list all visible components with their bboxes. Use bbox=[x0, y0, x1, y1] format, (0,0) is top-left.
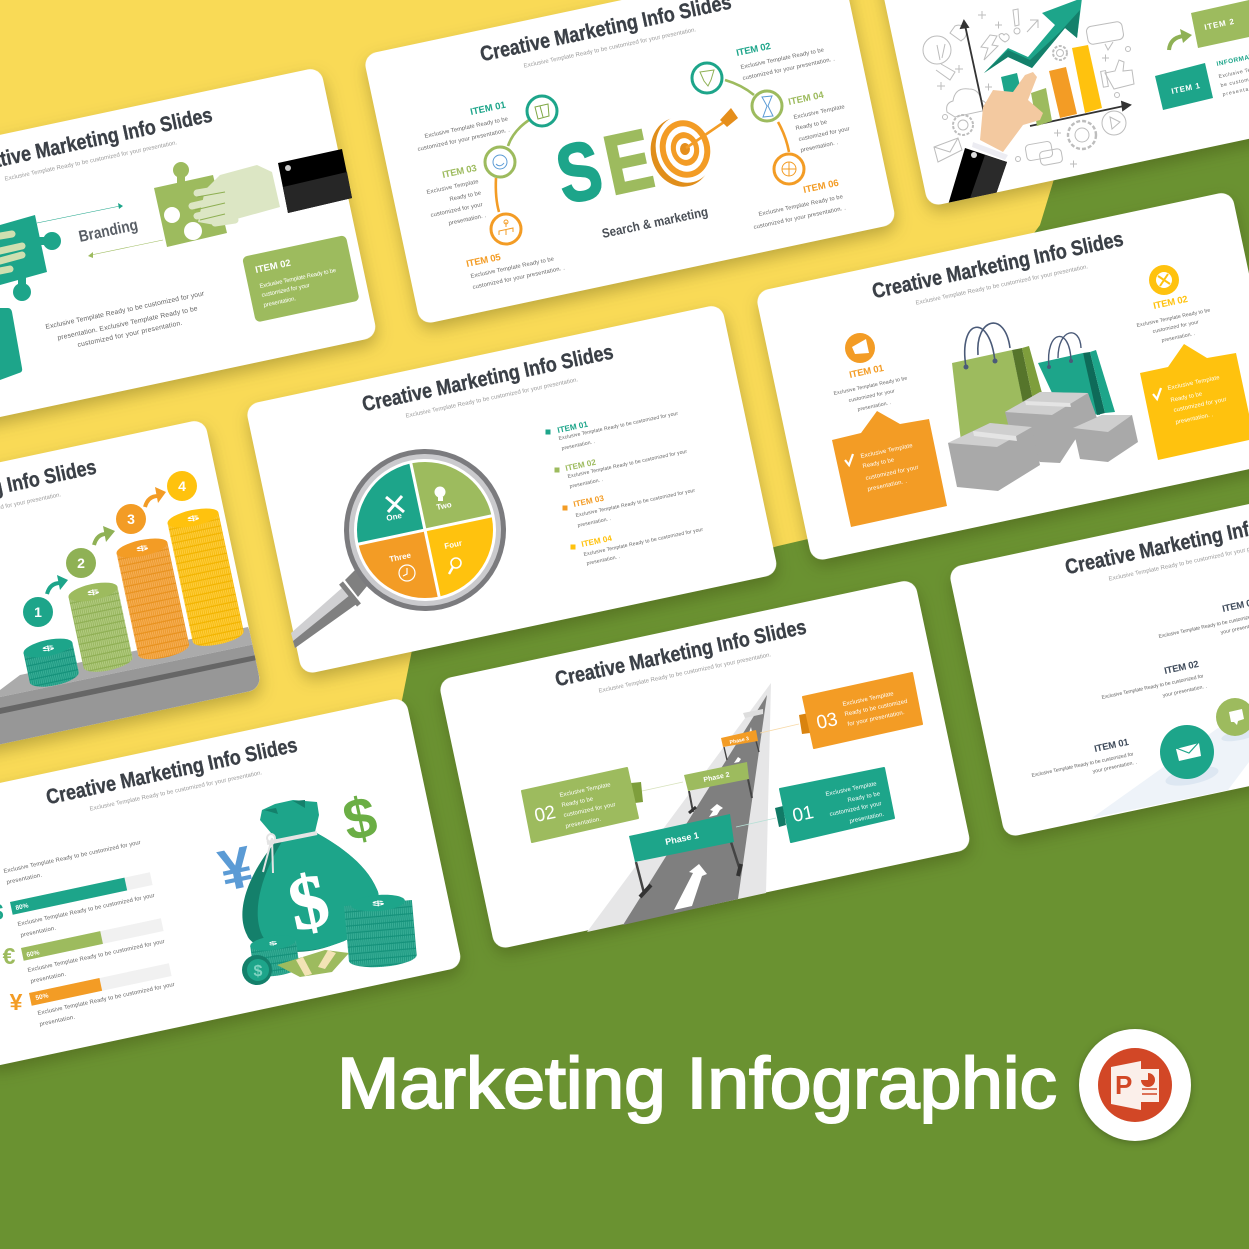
arrow: item 1 to item 2 bbox=[1169, 29, 1192, 50]
coin stack green: $ bbox=[86, 587, 100, 598]
callout: item 02: customized for your bbox=[261, 283, 310, 299]
information text bbox=[1216, 51, 1249, 98]
list item 03: Exclusive Template Ready to be customized for your bbox=[575, 488, 696, 519]
item 04 text bbox=[787, 90, 850, 154]
currency symbols: € bbox=[3, 943, 16, 969]
callout 01: customized for your bbox=[829, 801, 882, 818]
quadrant labels: One bbox=[386, 511, 403, 523]
list item 04: Exclusive Template Ready to be customized for your bbox=[583, 527, 704, 558]
heading: Creative Marketing Info Slides bbox=[553, 616, 808, 691]
doodle icons bbox=[923, 9, 1134, 168]
callout: item 02: presentation. bbox=[263, 296, 297, 309]
item 03 text: customized for your bbox=[430, 202, 483, 219]
callout 01: 01 bbox=[791, 802, 816, 827]
panel: SEO slide bbox=[363, 0, 897, 325]
panel: coins slide bbox=[0, 419, 262, 790]
slide card bbox=[755, 191, 1249, 562]
orange callout: customized for your bbox=[865, 465, 919, 482]
item 01 text: your presentation. . bbox=[1092, 760, 1137, 775]
item 1 box bbox=[1155, 63, 1213, 110]
list item 04 bbox=[570, 527, 704, 567]
icon: megaphone bbox=[845, 333, 875, 363]
paragraph 3: presentation. bbox=[30, 972, 67, 985]
paragraph 4: presentation. bbox=[39, 1015, 76, 1028]
paragraph 2: presentation. bbox=[20, 926, 57, 939]
pale road band bbox=[1092, 728, 1249, 818]
item 01 text: Exclusive Template Ready to be bbox=[833, 375, 908, 397]
currency symbols bbox=[0, 899, 23, 1015]
green shopping bag bbox=[952, 323, 1042, 450]
item 02 text bbox=[735, 41, 836, 82]
list item 03: presentation. . bbox=[577, 516, 612, 529]
paragraph bbox=[45, 290, 206, 349]
callout 01: Exclusive Template bbox=[825, 781, 878, 798]
icon: search bbox=[449, 558, 461, 574]
orange callout: Ready to be bbox=[862, 457, 895, 470]
connectors bbox=[642, 724, 799, 827]
branding label: Branding bbox=[77, 217, 140, 246]
panel: branding puzzle slide bbox=[0, 67, 378, 438]
list item 01: presentation. . bbox=[561, 439, 596, 452]
quadrant labels: Four bbox=[444, 538, 463, 551]
item 01 text bbox=[833, 363, 908, 413]
target with arrow bbox=[643, 108, 738, 194]
SEO letters: S bbox=[549, 124, 610, 222]
coin stack teal: $ bbox=[41, 643, 55, 654]
callout 02: Ready to be bbox=[561, 796, 594, 809]
coin stack small: $ bbox=[269, 940, 279, 947]
subtitle: Exclusive Template Ready to be customized for your presentation. bbox=[523, 27, 697, 70]
item 04 text: ITEM 04 bbox=[787, 90, 826, 108]
item 03 text: presentation. . bbox=[448, 213, 487, 227]
icon: globe bbox=[1149, 265, 1179, 295]
list item 01: Exclusive Template Ready to be customized for your bbox=[558, 411, 679, 442]
icon: mail bbox=[1160, 725, 1220, 789]
phase 1 sign bbox=[629, 814, 741, 897]
yellow callout bbox=[1140, 344, 1249, 460]
sleeve bbox=[948, 142, 1008, 203]
progress bar 50%: 50% bbox=[35, 992, 49, 1002]
coin stack orange bbox=[115, 535, 191, 663]
subtitle: Exclusive Template Ready to be customized for your presentation. bbox=[405, 377, 579, 420]
item 02 text: customized for your presentation. . bbox=[742, 56, 836, 82]
bar chart bbox=[1001, 45, 1102, 126]
slide card bbox=[245, 304, 779, 675]
subtitle: Exclusive Template Ready to be customized for your presentation. bbox=[4, 140, 178, 183]
item 06 text: Exclusive Template Ready to be bbox=[758, 194, 844, 218]
coin stack yellow: $ bbox=[186, 513, 200, 524]
slide card bbox=[0, 697, 463, 1068]
paragraph 3: Exclusive Template Ready to be customized for your bbox=[27, 939, 165, 974]
item 01 text bbox=[417, 100, 511, 153]
axes bbox=[961, 21, 1130, 126]
paragraph: Exclusive Template Ready to be customized for your bbox=[45, 290, 206, 331]
item 03 text: Exclusive Template bbox=[426, 179, 479, 196]
dollar symbol: $ bbox=[337, 784, 382, 854]
panel: shopping slide bbox=[755, 191, 1249, 562]
icon: bulb bbox=[434, 486, 446, 501]
step arrows bbox=[47, 487, 166, 594]
callout 03: Ready to be customized bbox=[844, 699, 908, 718]
item 2 box: ITEM 2 bbox=[1204, 17, 1235, 32]
coin stack yellow bbox=[166, 505, 245, 650]
phase 3 sign bbox=[721, 730, 759, 760]
item 02 text: Exclusive Template Ready to be bbox=[1136, 307, 1211, 329]
list item 04: presentation. . bbox=[586, 554, 621, 567]
item 02 text: your presentation. . bbox=[1162, 684, 1207, 699]
item 2 box bbox=[1191, 0, 1249, 48]
list item 02: ITEM 02 bbox=[565, 458, 597, 473]
item 06 text: ITEM 06 bbox=[802, 178, 840, 196]
callout 02: 02 bbox=[533, 802, 558, 827]
coin stack small bbox=[249, 933, 300, 979]
progress bar 80% bbox=[10, 872, 153, 915]
yellow callout: presentation. . bbox=[1175, 412, 1214, 426]
progress bar 60% bbox=[21, 918, 164, 961]
callout 02: presentation. bbox=[565, 817, 602, 830]
orange callout: Exclusive Template bbox=[860, 443, 914, 460]
item 04 text: Ready to be bbox=[795, 119, 828, 132]
platform bbox=[0, 627, 262, 750]
panel: money bag slide bbox=[0, 697, 463, 1068]
icon: powerpoint: P bbox=[1115, 1070, 1132, 1100]
money bag bbox=[242, 800, 379, 952]
item 02 text: ITEM 02 bbox=[1152, 294, 1189, 312]
slide card bbox=[438, 579, 972, 950]
callout 02 bbox=[522, 768, 643, 842]
item 01 text: customized for your bbox=[848, 388, 896, 404]
rising arrow bbox=[984, 0, 1082, 73]
parcel boxes bbox=[948, 392, 1138, 491]
magnifier lens bbox=[329, 434, 521, 626]
teal shopping bag bbox=[1038, 333, 1115, 415]
coin stack large: $ bbox=[372, 899, 385, 908]
phase 2 sign bbox=[684, 762, 752, 813]
heading: Creative Marketing Info Slides bbox=[44, 734, 299, 809]
list item 01 bbox=[546, 411, 679, 452]
panel: contact slide bbox=[948, 467, 1249, 838]
item 03 text: Ready to be bbox=[449, 190, 482, 203]
black sleeve bbox=[278, 149, 352, 213]
item 04 text: presentation. . bbox=[800, 140, 839, 154]
quadrant labels bbox=[386, 500, 463, 564]
item 04 text: customized for your bbox=[798, 126, 850, 143]
item 02 text: Exclusive Template Ready to be customized for bbox=[1101, 673, 1204, 701]
arrow: green bbox=[88, 240, 163, 258]
icon: tools bbox=[386, 496, 404, 512]
icon: powerpoint bbox=[1079, 1029, 1191, 1141]
item 01 text: customized for your presentation. . bbox=[417, 127, 511, 153]
item 05 text: customized for your presentation. . bbox=[472, 265, 566, 291]
item 04 text: Exclusive Template bbox=[793, 104, 845, 121]
callout 01: Ready to be bbox=[847, 791, 881, 804]
paragraph: presentation. Exclusive Template Ready to be bbox=[57, 305, 199, 342]
slide card bbox=[363, 0, 897, 325]
callout 03: for your presentation. bbox=[847, 710, 905, 728]
magnifier handle bbox=[291, 565, 372, 648]
paragraph 1: Exclusive Template Ready to be customized for your bbox=[3, 840, 141, 875]
step circles bbox=[23, 471, 197, 627]
list item 03: ITEM 03 bbox=[573, 494, 605, 509]
callout 03: 03 bbox=[815, 709, 840, 734]
step circles: 3 bbox=[127, 511, 135, 527]
item 1 box: ITEM 1 bbox=[1171, 81, 1201, 96]
phase 2 sign: Phase 2 bbox=[703, 772, 730, 784]
SEO letters bbox=[549, 111, 661, 222]
currency symbols: ¥ bbox=[10, 989, 23, 1015]
item 02 text: customized for your bbox=[1152, 319, 1200, 335]
yellow callout: Ready to be bbox=[1170, 391, 1203, 404]
slide card bbox=[948, 467, 1249, 838]
heading: Creative Marketing Info Slides bbox=[360, 341, 615, 416]
item 01 text: ITEM 01 bbox=[469, 100, 508, 118]
item 01 text bbox=[1031, 737, 1137, 779]
callout 02: Exclusive Template bbox=[559, 782, 612, 799]
item 01 text: Exclusive Template Ready to be customized for bbox=[1031, 751, 1134, 779]
item 03 text bbox=[426, 163, 487, 227]
heading: Creative Marketing Info Slides bbox=[870, 228, 1125, 303]
callout 01 bbox=[775, 768, 894, 842]
item 02 text: presentation. . bbox=[1161, 331, 1196, 344]
panel: growth chart slide bbox=[871, 0, 1249, 215]
teal puzzle piece bbox=[0, 215, 61, 301]
callout: item 02: ITEM 02 bbox=[254, 258, 292, 276]
coin stack large bbox=[343, 892, 417, 970]
item 05 text: Exclusive Template Ready to be bbox=[470, 256, 555, 280]
coin face: $ bbox=[254, 963, 263, 980]
list item 04: ITEM 04 bbox=[581, 534, 613, 549]
callout 03 bbox=[799, 673, 922, 748]
paragraph: customized for your presentation. bbox=[77, 320, 183, 349]
pointing hand bbox=[980, 72, 1043, 152]
paragraph 1: presentation. bbox=[6, 873, 43, 886]
search and marketing caption: Search & marketing bbox=[601, 204, 709, 241]
orange callout bbox=[832, 411, 947, 527]
subtitle: Exclusive Template Ready to be customized for your presentation. bbox=[598, 652, 772, 695]
progress bar 50% bbox=[29, 963, 172, 1006]
item 05 text: ITEM 05 bbox=[465, 252, 503, 270]
phase 1 sign: Phase 1 bbox=[664, 830, 700, 847]
step circles: 2 bbox=[77, 555, 85, 571]
paragraph 2: Exclusive Template Ready to be customized for your bbox=[17, 893, 155, 928]
step circles: 1 bbox=[34, 604, 42, 620]
callout: item 02: Exclusive Template Ready to be bbox=[259, 268, 337, 290]
teal box bbox=[0, 308, 22, 380]
coin stack green bbox=[67, 579, 134, 675]
icon: clock bbox=[399, 565, 415, 581]
yellow callout: Exclusive Template bbox=[1167, 375, 1221, 392]
progress bar 80%: 80% bbox=[15, 902, 29, 912]
icon: chat bbox=[1216, 698, 1249, 744]
item 03 text: ITEM 03 bbox=[441, 163, 478, 181]
item 02 text: ITEM 02 bbox=[735, 41, 772, 59]
list item 02: Exclusive Template Ready to be customized for your bbox=[567, 449, 688, 480]
callout 01: presentation. bbox=[849, 812, 885, 825]
subtitle: Exclusive Template Ready to be customized for your presentation. bbox=[915, 264, 1089, 307]
item 02 text bbox=[1101, 659, 1207, 701]
quadrant chart bbox=[344, 449, 506, 611]
road bbox=[587, 683, 771, 932]
callout 03: Exclusive Template bbox=[842, 691, 895, 708]
progress bar 60%: 60% bbox=[26, 949, 40, 959]
SEO letters: E bbox=[596, 111, 661, 213]
yellow callout: customized for your bbox=[1173, 397, 1227, 414]
connectors bbox=[496, 80, 789, 212]
phase 3 sign: Phase 3 bbox=[729, 736, 750, 746]
green puzzle piece bbox=[154, 162, 227, 247]
panel: road slide bbox=[438, 579, 972, 950]
arrow: teal bbox=[37, 203, 123, 223]
panel: magnifier slide bbox=[245, 304, 779, 675]
item 02 text: Exclusive Template Ready to be bbox=[740, 47, 825, 71]
yen symbol: ¥ bbox=[213, 834, 258, 904]
coin face bbox=[242, 955, 272, 985]
quadrant labels: Three bbox=[389, 551, 412, 564]
list item 02 bbox=[554, 449, 688, 490]
callout 02: customized for your bbox=[563, 802, 616, 819]
ring glyphs bbox=[493, 70, 796, 235]
coin stack orange: $ bbox=[135, 543, 149, 554]
item 06 text bbox=[753, 178, 847, 231]
orange callout: presentation. . bbox=[867, 479, 908, 493]
item 01 text: Exclusive Template Ready to be bbox=[424, 116, 509, 140]
item 01 text: ITEM 01 bbox=[1093, 737, 1131, 755]
list item 03 bbox=[562, 488, 696, 529]
item 01 text: presentation. . bbox=[857, 400, 892, 413]
bills bbox=[277, 950, 349, 977]
list item 01: ITEM 01 bbox=[557, 420, 589, 435]
paragraph 4: Exclusive Template Ready to be customized for your bbox=[37, 982, 175, 1017]
item 02 text bbox=[1136, 294, 1211, 344]
quadrant labels: Two bbox=[436, 500, 453, 512]
item 06 text: customized for your presentation. . bbox=[753, 205, 847, 231]
item 01 text: ITEM 01 bbox=[848, 363, 886, 381]
callout: item 02 bbox=[242, 235, 360, 323]
list item 02: presentation. . bbox=[569, 477, 604, 490]
item 03 text bbox=[1158, 597, 1249, 640]
money bag: $ bbox=[281, 858, 336, 948]
item 02 text: ITEM 02 bbox=[1163, 659, 1200, 677]
icon rings bbox=[485, 63, 804, 244]
step circles: 4 bbox=[178, 478, 186, 494]
subtitle: Exclusive Template Ready to be customized for your presentation. bbox=[89, 770, 263, 813]
hand bbox=[192, 165, 280, 225]
slide card bbox=[0, 67, 378, 438]
item 05 text bbox=[465, 252, 566, 291]
slide card bbox=[871, 0, 1249, 207]
slide card bbox=[0, 419, 262, 790]
coin stack teal bbox=[22, 635, 80, 690]
title: Marketing Infographic bbox=[337, 1044, 1057, 1124]
